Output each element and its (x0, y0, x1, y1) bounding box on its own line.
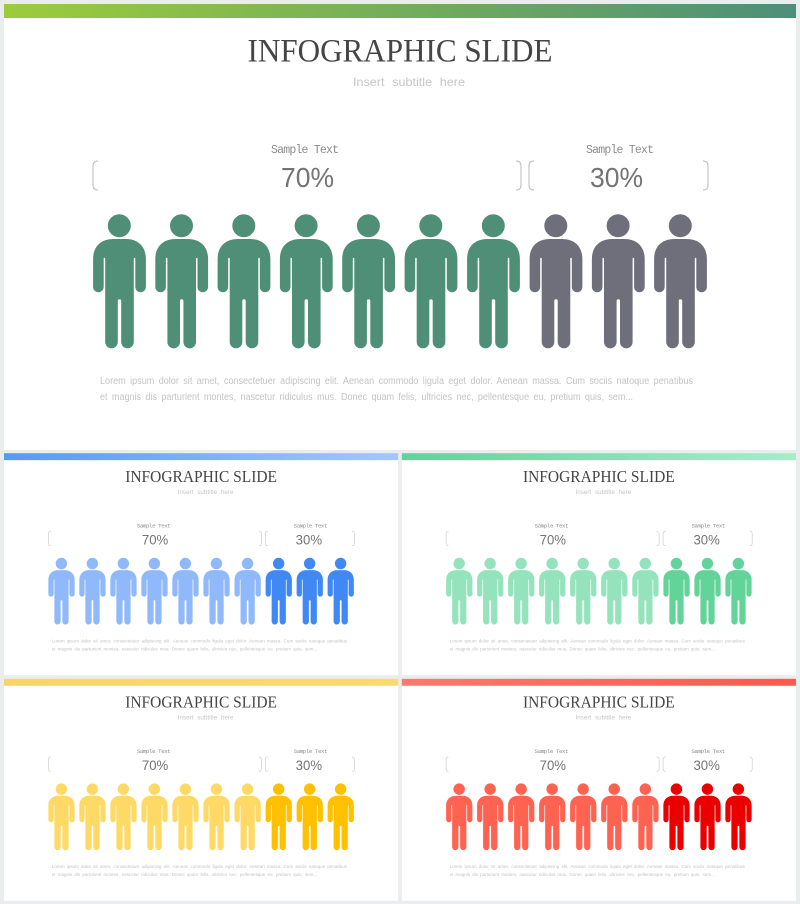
value: 70%: 70% (540, 531, 566, 547)
label: 70% heading: Sample Text (137, 522, 171, 529)
value: 30%: 30% (296, 757, 322, 773)
label: 30% heading: Sample Text (294, 748, 328, 755)
subtitle: Insert subtitle here (575, 490, 632, 496)
body text (450, 638, 745, 652)
people row: 30% (266, 783, 354, 850)
body text: et magnis dis parturient montes, nascetur ridiculus mus. Donec quam felis, ultricies nec, pellentesque eu, pretium quis, sem... (450, 646, 715, 652)
people row: 30% (266, 558, 354, 625)
brackets (48, 757, 354, 771)
body text: Lorem ipsum dolor sit amet, consectetuer adipiscing elit. Aenean commodo ligula eget dolor. Aenean massa. Cum sociis natoque penatibus (52, 864, 347, 870)
body text: Lorem ipsum dolor sit amet, consectetuer adipiscing elit. Aenean commodo ligula eget dolor. Aenean massa. Cum sociis natoque penatibus (450, 864, 745, 870)
panel: yellow slide (4, 679, 398, 901)
label: 30% heading: Sample Text (586, 144, 654, 157)
people row: 70% (48, 783, 261, 850)
panel: red slide (402, 679, 796, 901)
value: 70%: 70% (142, 757, 168, 773)
brackets (446, 531, 752, 546)
title: INFOGRAPHIC SLIDE (248, 34, 552, 70)
value: 70%: 70% (540, 757, 566, 773)
body text: et magnis dis parturient montes, nascetur ridiculus mus. Donec quam felis, ultricies nec, pellentesque eu, pretium quis, sem... (100, 392, 633, 403)
title: INFOGRAPHIC SLIDE (125, 467, 277, 486)
label: 30% heading: Sample Text (691, 522, 725, 529)
body text: Lorem ipsum dolor sit amet, consectetuer adipiscing elit. Aenean commodo ligula eget dolor. Aenean massa. Cum sociis natoque penatibus (100, 376, 693, 387)
subtitle: Insert subtitle here (178, 716, 234, 722)
panel: blue slide (4, 453, 398, 675)
body text (100, 376, 693, 403)
subtitle: Insert subtitle here (353, 75, 465, 89)
panel: main green slide (4, 4, 796, 450)
subtitle: Insert subtitle here (178, 490, 234, 496)
value: 30%: 30% (693, 531, 720, 547)
people row: 30% (530, 214, 707, 348)
people row: 70% (48, 558, 261, 625)
subtitle: Insert subtitle here (575, 716, 632, 722)
label: 30% heading: Sample Text (294, 522, 328, 529)
value: 30%: 30% (693, 757, 720, 773)
brackets (446, 757, 752, 771)
label: 70% heading: Sample Text (535, 748, 569, 755)
label: 30% heading: Sample Text (691, 748, 725, 755)
people row: 70% (446, 783, 659, 850)
value: 30%: 30% (296, 531, 322, 547)
header gradient bar (4, 453, 398, 460)
title: INFOGRAPHIC SLIDE (125, 692, 277, 711)
body text (450, 864, 745, 878)
body text: et magnis dis parturient montes, nascetur ridiculus mus. Donec quam felis, ultricies nec, pellentesque eu, pretium quis, sem... (52, 872, 317, 878)
people row: 30% (663, 558, 752, 625)
body text: Lorem ipsum dolor sit amet, consectetuer adipiscing elit. Aenean commodo ligula eget dolor. Aenean massa. Cum sociis natoque penatibus (52, 638, 347, 644)
people row: 30% (663, 783, 752, 850)
body text (52, 864, 347, 878)
brackets (48, 531, 354, 546)
body text: et magnis dis parturient montes, nascetur ridiculus mus. Donec quam felis, ultricies nec, pellentesque eu, pretium quis, sem... (450, 872, 715, 878)
header gradient bar (4, 4, 796, 18)
body text: Lorem ipsum dolor sit amet, consectetuer adipiscing elit. Aenean commodo ligula eget dolor. Aenean massa. Cum sociis natoque penatibus (450, 638, 745, 644)
label: 70% heading: Sample Text (535, 522, 569, 529)
label: 70% heading: Sample Text (137, 748, 171, 755)
panel: mint slide (402, 453, 796, 675)
brackets (93, 161, 708, 190)
title: INFOGRAPHIC SLIDE (523, 467, 675, 486)
people row: 70% (446, 558, 659, 625)
title: INFOGRAPHIC SLIDE (523, 692, 675, 711)
body text: et magnis dis parturient montes, nascetur ridiculus mus. Donec quam felis, ultricies nec, pellentesque eu, pretium quis, sem... (52, 646, 317, 652)
header gradient bar (4, 679, 398, 686)
header gradient bar (402, 453, 796, 460)
header gradient bar (402, 679, 796, 686)
body text (52, 638, 347, 652)
people row: 70% (93, 214, 520, 348)
value: 70%: 70% (142, 531, 168, 547)
label: 70% heading: Sample Text (271, 144, 339, 157)
value: 30%: 30% (590, 162, 643, 193)
value: 70%: 70% (281, 162, 334, 193)
